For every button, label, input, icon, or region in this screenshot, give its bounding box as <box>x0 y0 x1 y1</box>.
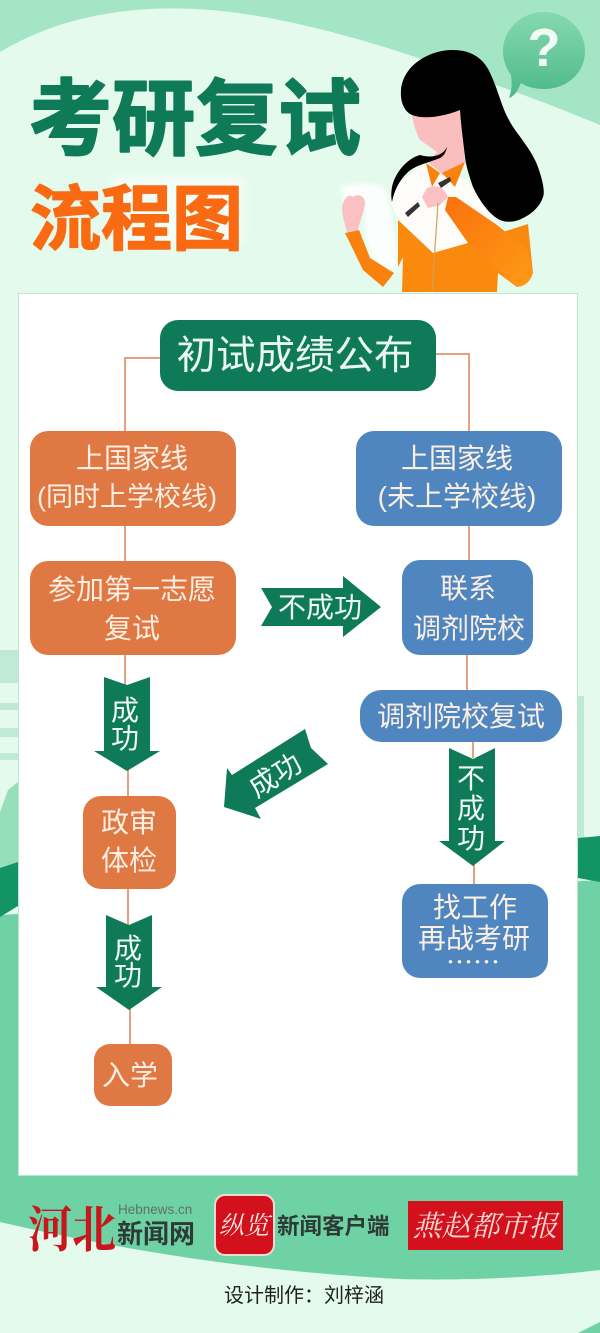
box: preliminary results <box>160 320 436 391</box>
box: preliminary results: 初试成绩公布 <box>176 334 414 378</box>
logo: Hebei news site: 新闻网 <box>117 1219 195 1249</box>
illustration: girl reading a paper <box>340 50 544 292</box>
subtitle: 流程图 <box>30 181 243 260</box>
arrow: success down 2: 成 <box>114 933 142 964</box>
box: first choice retest: 复试 <box>104 613 160 644</box>
arrow: not successful down: 成 <box>457 793 485 824</box>
arrow: success down 2 <box>96 915 162 1010</box>
box: first choice retest: 参加第一志愿 <box>48 574 216 605</box>
box: find a job or retry <box>402 884 548 980</box>
box: national and school line <box>30 431 236 526</box>
arrow: success down 1: 成 <box>111 695 139 726</box>
box: contact adjustment schools: 调剂院校 <box>413 613 525 644</box>
arrow: success diagonal <box>224 729 328 819</box>
box: national and school line: 上国家线 <box>76 443 188 474</box>
box: national line only: (未上学校线) <box>378 481 536 512</box>
logo: Hebei news site: 河北 <box>28 1202 116 1258</box>
icon: speech bubble with question mark <box>503 12 585 98</box>
logo: Zonglan news client: 纵览 <box>219 1212 273 1240</box>
box: enrollment: 入学 <box>102 1060 158 1091</box>
box: find a job or retry: 找工作 <box>433 892 517 923</box>
logo: Yanzhao Metropolis Daily: 燕赵都市报 <box>412 1211 560 1243</box>
arrow: success diagonal: 成功 <box>243 747 307 803</box>
box: first choice retest <box>30 561 236 655</box>
arrow: success down 1 <box>94 677 160 771</box>
logo: Hebei news site <box>28 1202 195 1258</box>
box: political review and physical exam <box>83 796 176 889</box>
box: political review and physical exam: 体检 <box>101 845 157 876</box>
logo: Hebei news site: Hebnews.cn <box>118 1202 192 1217</box>
icon: speech bubble with question mark: ? <box>528 18 560 78</box>
panel: flowchart <box>18 294 578 1176</box>
logo: Zonglan news client <box>215 1195 390 1255</box>
box: adjustment school retest: 调剂院校复试 <box>377 701 545 732</box>
box: national and school line: (同时上学校线) <box>37 482 217 512</box>
title: 考研复试 <box>29 73 361 166</box>
box: contact adjustment schools: 联系 <box>440 573 496 604</box>
box: enrollment <box>94 1044 172 1106</box>
credit line: 设计制作：刘梓涵 <box>224 1284 384 1307</box>
logo: Yanzhao Metropolis Daily <box>408 1201 563 1250</box>
box: national line only <box>356 431 562 526</box>
box: contact adjustment schools <box>402 560 533 655</box>
box: national line only: 上国家线 <box>401 443 513 474</box>
arrow: not successful right: 不成功 <box>278 592 362 623</box>
logo: Zonglan news client: 新闻客户端 <box>277 1213 390 1239</box>
connector lines <box>125 354 474 1044</box>
box: political review and physical exam: 政审 <box>101 807 157 838</box>
box: find a job or retry: 再战考研 <box>418 923 530 954</box>
arrow: not successful down: 不 <box>457 763 485 794</box>
arrow: not successful right <box>261 576 381 637</box>
box: adjustment school retest <box>360 690 562 742</box>
arrow: success down 1: 功 <box>111 723 139 754</box>
box: find a job or retry: …… <box>446 941 500 980</box>
arrow: not successful down: 功 <box>457 823 485 854</box>
arrow: success down 2: 功 <box>114 960 142 991</box>
arrow: not successful down <box>439 748 505 866</box>
